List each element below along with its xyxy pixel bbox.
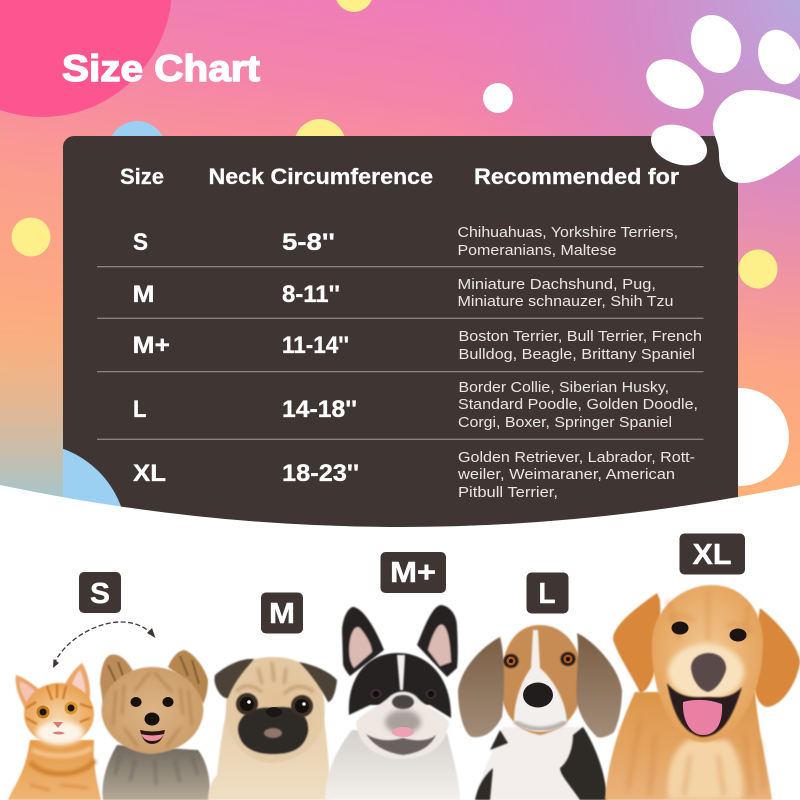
pug muzzle xyxy=(238,707,308,754)
pug body xyxy=(208,705,330,800)
illustration: golden retriever xyxy=(605,585,800,800)
yorkie head xyxy=(102,667,203,754)
yorkie body xyxy=(103,745,210,800)
frenchie black head xyxy=(349,653,451,718)
row M: M xyxy=(132,281,154,308)
row S: Pomeranians, Maltese xyxy=(458,242,616,259)
retriever chest highlight xyxy=(668,740,743,800)
arrow: dashed curved double arrow xyxy=(53,622,156,668)
row M+: 11-14'' xyxy=(282,332,349,359)
retriever ears xyxy=(613,593,800,707)
retriever eyes and nose xyxy=(672,622,746,692)
badge: M+: M+ xyxy=(390,557,436,589)
row S: Chihuahuas, Yorkshire Terriers, xyxy=(458,224,678,241)
row dividers xyxy=(97,267,704,439)
table header row xyxy=(120,164,679,189)
cat eyes and nose xyxy=(36,702,78,734)
pug head xyxy=(226,657,325,763)
row M+: M+ xyxy=(132,332,170,359)
table background xyxy=(63,136,738,556)
row L: Standard Poodle, Golden Doodle, xyxy=(458,396,698,413)
badge: S: S xyxy=(90,578,110,610)
yorkie fur strokes xyxy=(113,672,192,747)
row M+: Bulldog, Beagle, Brittany Spaniel xyxy=(458,346,695,363)
retriever body xyxy=(605,692,772,800)
row XL: Pitbull Terrier, xyxy=(458,484,558,501)
pug eye patches xyxy=(236,693,313,738)
illustration: french bulldog xyxy=(325,605,460,800)
title: Size Chart xyxy=(62,48,260,89)
beagle head xyxy=(501,625,583,735)
beagle ears xyxy=(458,633,622,738)
row XL: 18-23'' xyxy=(282,460,359,487)
row M: Miniature Dachshund, Pug, xyxy=(458,276,656,293)
row XL: weiler, Weimaraner, American xyxy=(457,466,675,483)
illustration: pug xyxy=(208,657,337,800)
cat ears xyxy=(16,663,90,712)
row M+ xyxy=(132,328,702,363)
cat chest bands xyxy=(30,748,95,790)
beagle black patches xyxy=(475,727,607,800)
badge: S xyxy=(79,572,121,613)
illustration: beagle xyxy=(458,625,622,800)
cat muzzle xyxy=(36,721,84,745)
badge: XL xyxy=(680,534,745,574)
cat stripes xyxy=(26,684,92,724)
frenchie face xyxy=(366,689,437,755)
row M+: Boston Terrier, Bull Terrier, French xyxy=(458,328,702,345)
yorkie face xyxy=(130,697,174,744)
retriever brow shading xyxy=(668,590,752,640)
row L: 14-18'' xyxy=(282,396,357,423)
row S: S xyxy=(133,229,148,256)
row S xyxy=(133,224,678,259)
row L: Corgi, Boxer, Springer Spaniel xyxy=(458,414,672,431)
row XL xyxy=(133,449,695,501)
table header row: Recommended for xyxy=(474,164,679,189)
row L xyxy=(133,379,698,431)
yorkie ears xyxy=(100,650,208,704)
beagle body xyxy=(475,727,607,800)
retriever muzzle xyxy=(668,644,744,700)
decorative circles behind the table xyxy=(0,0,789,486)
row M: 8-11'' xyxy=(282,281,340,308)
row L: Border Collie, Siberian Husky, xyxy=(458,379,669,396)
pug ears xyxy=(214,659,337,702)
retriever tongue xyxy=(683,700,722,735)
table header row: Size xyxy=(120,164,164,189)
row L: L xyxy=(133,396,146,423)
cat head xyxy=(24,683,94,745)
frenchie ears xyxy=(342,605,458,677)
pug forehead wrinkles xyxy=(236,662,314,694)
frenchie jowls xyxy=(356,692,449,759)
row M: Miniature schnauzer, Shih Tzu xyxy=(458,293,674,310)
badge: XL: XL xyxy=(692,539,732,571)
badge: M+ xyxy=(380,552,446,593)
retriever mouth xyxy=(667,683,742,737)
illustration: orange cat xyxy=(8,663,101,800)
table header row: Neck Circumference xyxy=(208,164,433,189)
row M xyxy=(132,276,674,310)
row XL: XL xyxy=(133,460,166,487)
frenchie white blaze xyxy=(397,655,405,690)
white curved lower section xyxy=(0,485,800,800)
badge: L: L xyxy=(538,578,556,610)
blue circle inside table corner xyxy=(63,448,121,506)
icon: white paw print xyxy=(637,7,800,183)
retriever head xyxy=(652,585,763,742)
badge: M xyxy=(261,592,303,634)
illustration: yorkshire terrier xyxy=(100,650,210,800)
badge: M: M xyxy=(269,598,295,630)
row XL: Golden Retriever, Labrador, Rott- xyxy=(458,449,695,466)
yorkie chest fur xyxy=(115,755,198,785)
beagle white blaze and muzzle xyxy=(514,630,567,732)
frenchie body xyxy=(325,730,460,800)
cat body xyxy=(8,740,101,800)
beagle face xyxy=(504,652,576,729)
badge: L xyxy=(526,572,568,614)
row S: 5-8'' xyxy=(282,229,335,256)
panel: size table xyxy=(63,136,738,527)
retriever fur strokes xyxy=(628,720,764,795)
